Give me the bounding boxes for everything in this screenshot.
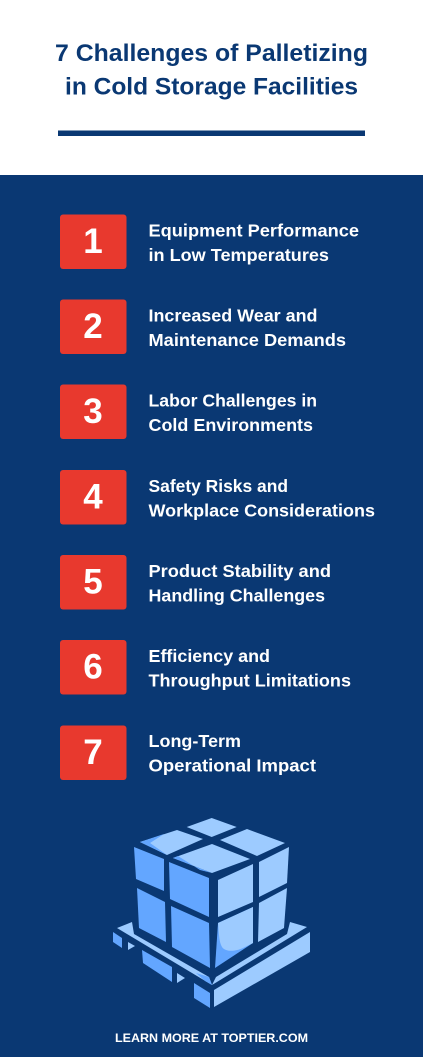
pallet deck [117,922,310,1007]
challenge 7 [60,726,316,780]
challenge 3: Cold Environments [148,415,313,435]
challenge 5: Product Stability and [148,561,331,581]
box stack left face [134,847,210,968]
challenge 1: Equipment Performance [148,220,359,240]
title: 7 Challenges of Palletizing [55,40,368,67]
challenge 4: Workplace Considerations [148,500,375,520]
challenge 6: Efficiency and [148,646,270,666]
challenge 1 [60,214,359,269]
title underline [58,130,365,136]
challenge 4: Safety Risks and [148,476,288,496]
challenge 2 [60,300,346,354]
challenge 7: 7 [83,733,103,772]
challenge 3: 3 [83,392,103,431]
box stack right face [215,847,289,968]
title: in Cold Storage Facilities [65,74,358,100]
challenge 6: Throughput Limitations [148,670,351,690]
icon: pallet with stacked boxes [113,818,310,1008]
challenge 1: 1 [83,222,103,261]
challenge 4 [60,470,375,524]
challenge 3 [60,384,317,439]
challenge 4: 4 [83,478,103,516]
pallet blocks [113,932,210,1008]
challenge 5: Handling Challenges [148,586,325,606]
challenge 5: 5 [83,562,103,602]
challenge 6 [60,640,351,694]
challenge 2: Maintenance Demands [148,330,346,350]
challenge 2: Increased Wear and [148,306,318,326]
challenge 1: in Low Temperatures [148,245,329,265]
challenge 5 [60,555,331,610]
title [55,40,368,100]
challenge 7: Operational Impact [148,756,316,776]
box stack top [140,818,285,873]
challenge 6: 6 [83,648,103,686]
challenge 3: Labor Challenges in [148,390,317,410]
challenge 2: 2 [83,307,103,346]
footer call to action: LEARN MORE AT TOPTIER.COM [115,1031,308,1045]
challenge 7: Long-Term [148,731,241,751]
